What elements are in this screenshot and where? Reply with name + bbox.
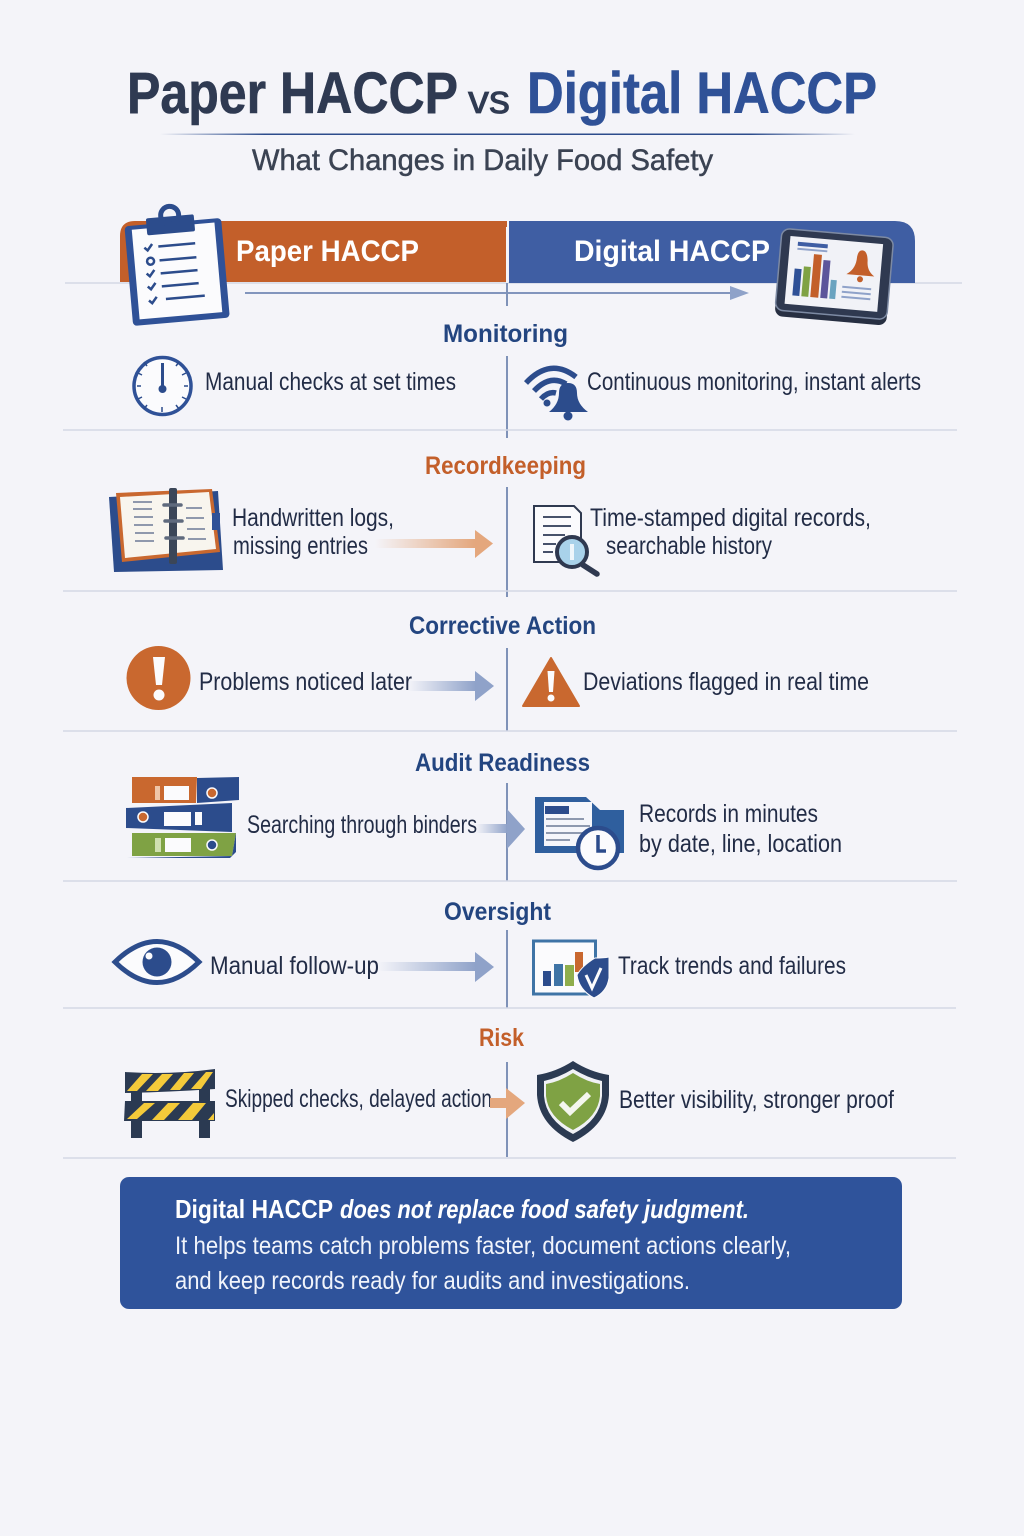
heading: Monitoring: Monitoring [443, 320, 568, 348]
heading: Oversight: Oversight [444, 898, 552, 926]
icon: chart with shield [534, 941, 609, 998]
icon: barrier [124, 1069, 215, 1138]
arrow: audit readiness [476, 809, 525, 849]
title: Paper HACCP [127, 61, 458, 126]
callout heading: does not replace food safety judgment. [340, 1194, 749, 1224]
callout body: and keep records ready for audits and investigations. [175, 1267, 690, 1295]
heading: Recordkeeping: Recordkeeping [425, 452, 586, 480]
title: Digital HACCP [527, 61, 877, 126]
header: digital column [509, 221, 915, 283]
text: paper oversight: Manual follow-up [210, 952, 379, 980]
text: paper recordkeeping [232, 504, 394, 560]
heading: Audit Readiness: Audit Readiness [415, 749, 590, 777]
arrow: risk [490, 1088, 525, 1119]
text: paper recordkeeping: Handwritten logs, [232, 504, 394, 532]
header: paper column: Paper HACCP [236, 235, 419, 268]
text: paper corrective action: Problems noticed later [199, 668, 412, 696]
icon: tablet [774, 228, 894, 326]
arrow: recordkeeping [375, 530, 493, 558]
icon: warning triangle [523, 658, 579, 706]
icon: alert circle [126, 646, 190, 710]
column divider [506, 227, 508, 1157]
text: digital risk: Better visibility, stronger proof [619, 1086, 894, 1114]
text: digital corrective action: Deviations flagged in real time [583, 668, 869, 696]
text: digital monitoring: Continuous monitoring, instant alerts [587, 368, 921, 396]
callout body [175, 1232, 791, 1295]
text: digital audit readiness: by date, line, location [639, 830, 842, 858]
text: paper recordkeeping: missing entries [233, 532, 368, 560]
text: paper audit readiness: Searching through binders [247, 811, 477, 839]
title: vs [468, 78, 510, 122]
heading: Corrective Action: Corrective Action [409, 612, 596, 640]
text: digital recordkeeping [590, 504, 871, 560]
icon: eye [115, 942, 199, 982]
title [127, 61, 877, 126]
subtitle: What Changes in Daily Food Safety [252, 144, 713, 177]
text: digital audit readiness [639, 800, 842, 858]
text: digital audit readiness: Records in minutes [639, 800, 818, 828]
heading: Risk: Risk [479, 1024, 524, 1052]
arrow: corrective action [408, 671, 494, 701]
icon: folder with clock [535, 797, 624, 868]
header arrow [245, 286, 749, 300]
icon: green shield [537, 1061, 609, 1142]
header: paper column [120, 221, 507, 283]
row: risk [124, 1024, 894, 1142]
icon: open binder [109, 488, 223, 572]
callout [120, 1177, 902, 1309]
icon: stacked binders [126, 777, 239, 858]
arrow: oversight [378, 952, 494, 982]
callout heading: Digital HACCP [175, 1194, 333, 1224]
text: digital oversight: Track trends and failures [618, 952, 846, 980]
icon: wifi alert bell [526, 368, 588, 420]
text: paper monitoring: Manual checks at set times [205, 368, 456, 396]
row: recordkeeping [109, 452, 871, 574]
row: oversight [115, 898, 846, 998]
text: digital recordkeeping: searchable history [606, 532, 772, 560]
icon: document with magnifier [534, 506, 597, 574]
callout body: It helps teams catch problems faster, document actions clearly, [175, 1232, 791, 1260]
row: audit readiness [126, 749, 842, 868]
row: monitoring [134, 320, 921, 420]
header: digital column: Digital HACCP [574, 235, 770, 268]
icon: clock [134, 358, 191, 414]
header lines [65, 282, 962, 284]
icon: clipboard [123, 202, 230, 326]
text: digital recordkeeping: Time-stamped digital records, [590, 504, 871, 532]
row: corrective action [126, 612, 869, 710]
text: paper risk: Skipped checks, delayed action [225, 1085, 492, 1113]
